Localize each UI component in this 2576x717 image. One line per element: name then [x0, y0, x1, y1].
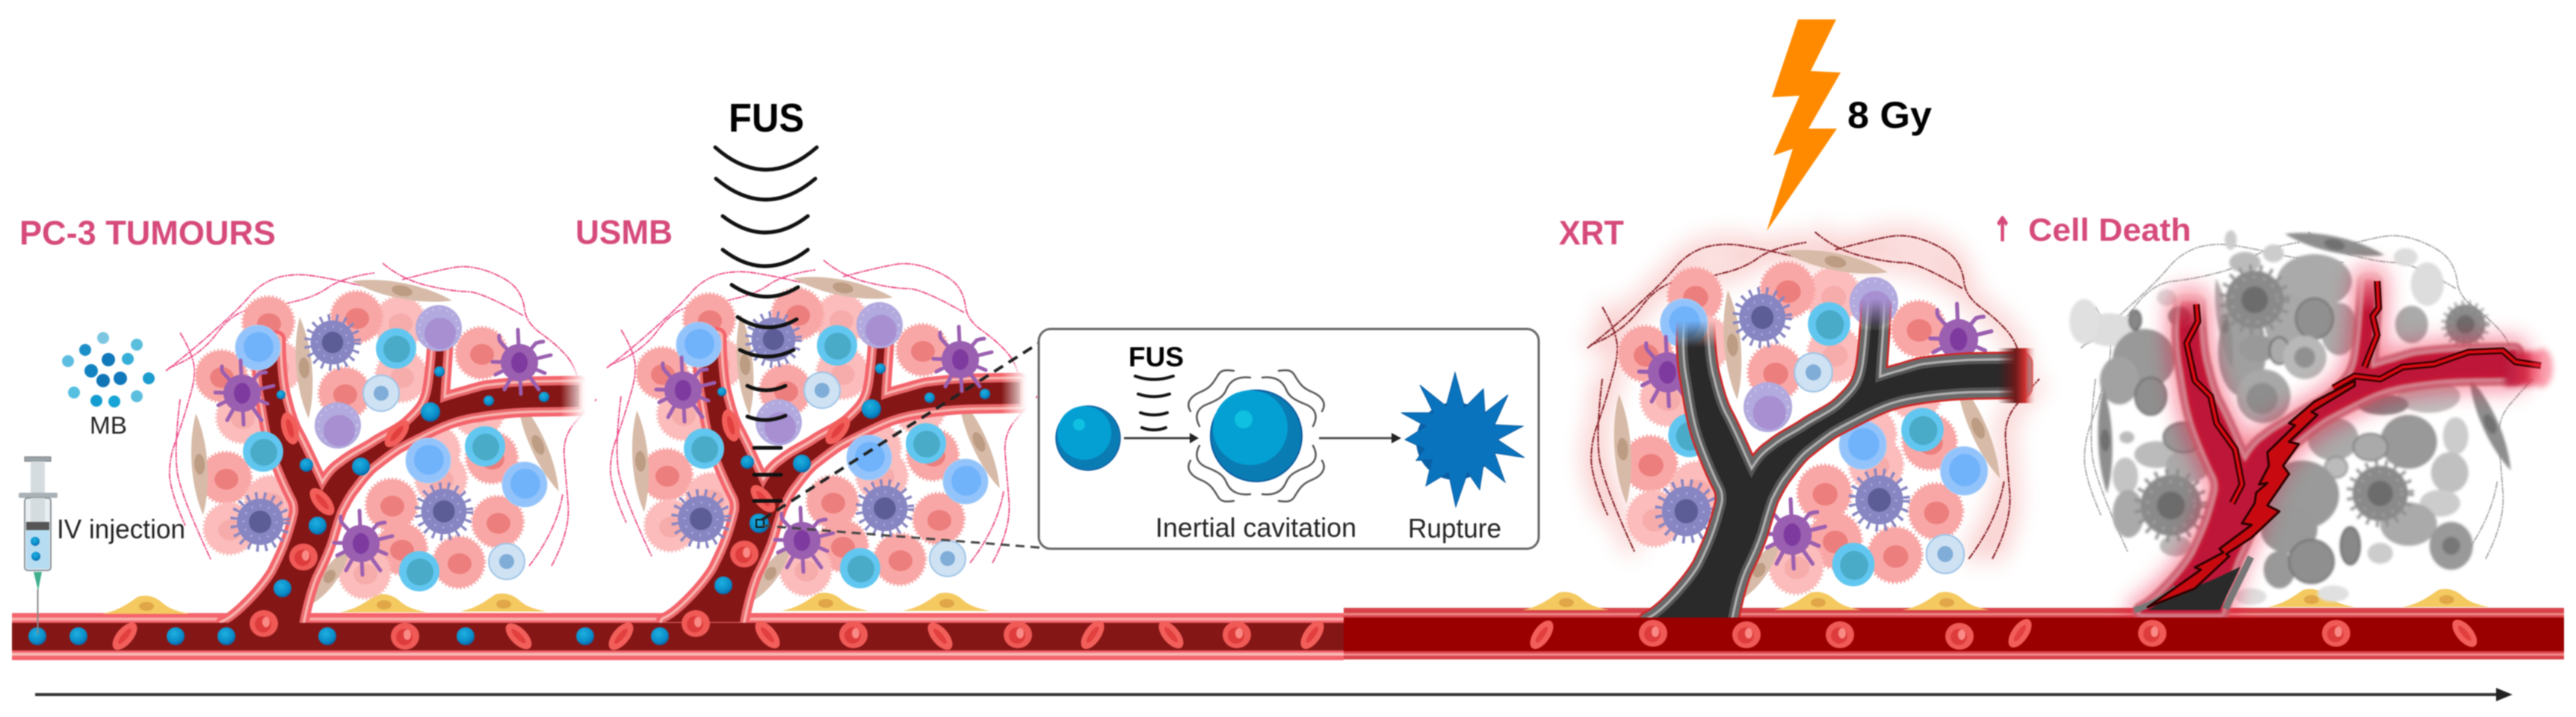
- icon: ruptured microbubble: [1401, 372, 1525, 507]
- icon: microbubble cluster: [62, 332, 155, 407]
- inset panel: inertial cavitation: [1039, 329, 1539, 549]
- icon: oscillating microbubble: [1188, 370, 1324, 502]
- heading: Cell Death: Cell Death: [2028, 212, 2191, 248]
- inset FUS arcs: [1135, 376, 1173, 430]
- damaged vessel tree with red glow: [2142, 281, 2515, 612]
- label: FUS: FUS: [729, 96, 804, 141]
- blood vessel lumen with cells: [12, 610, 2564, 654]
- label: 8 Gy: 8 Gy: [1847, 94, 1932, 136]
- tumour 2: USMB tumour with vessels: [607, 260, 1037, 622]
- endothelial yellow cells: [102, 589, 2489, 614]
- heading: USMB: USMB: [575, 213, 673, 251]
- label: Rupture: Rupture: [1408, 513, 1501, 544]
- timeline arrow: [35, 688, 2512, 701]
- label: inset FUS: FUS: [1128, 342, 1184, 372]
- tumour 3: XRT tumour with blackened vessels: [1587, 232, 2039, 623]
- tumour 4: cell death tumour, grey necrotic cells: [2069, 227, 2553, 612]
- label: Inertial cavitation: Inertial cavitation: [1155, 512, 1356, 543]
- icon: lightning bolt: [1767, 19, 1841, 231]
- label: IV injection: IV injection: [57, 514, 185, 544]
- arm end fade: [2505, 351, 2542, 386]
- label: MB: MB: [90, 412, 127, 439]
- icon: microbubble: [1056, 406, 1120, 470]
- arrow to rupture: [1319, 433, 1401, 443]
- jagged vessel rupture: [2148, 281, 2541, 607]
- arm end glow: [2532, 348, 2553, 387]
- icon: syringe: [19, 457, 58, 634]
- selected microbubble and dashed zoom lines: [750, 343, 1045, 548]
- arrow to cavitation: [1124, 433, 1199, 443]
- tumour 1: PC-3 tumour with vessels: [166, 263, 596, 625]
- heading: XRT: XRT: [1559, 214, 1624, 252]
- microbubbles in vessel: [28, 627, 669, 645]
- heading: Cell Death: ↑: [1993, 211, 2012, 249]
- FUS ultrasound wave arcs: [715, 147, 817, 501]
- blood vessel walls: [12, 608, 2564, 660]
- blackened trunk base: [2134, 557, 2251, 610]
- red blood cells: [108, 610, 2482, 654]
- heading: PC-3 TUMOURS: PC-3 TUMOURS: [19, 214, 276, 252]
